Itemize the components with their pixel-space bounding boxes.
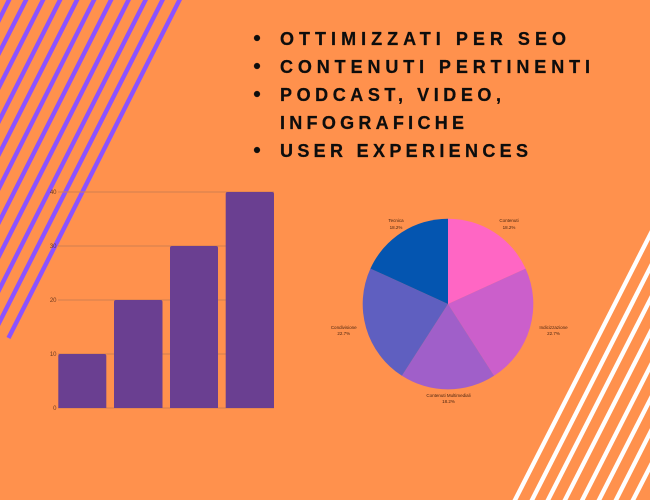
pie labels: 22.7% bbox=[337, 331, 350, 336]
slice: Tecnica bbox=[370, 219, 448, 304]
white diagonal stripes bbox=[514, 231, 650, 500]
bullet 2: CONTENUTI PERTINENTI bbox=[280, 57, 590, 77]
slice: Indicizzazione bbox=[448, 269, 533, 376]
pie labels: Condivisione bbox=[331, 325, 357, 330]
slice: Contenuti Multimediali bbox=[402, 304, 494, 389]
axis labels bbox=[50, 190, 57, 412]
bullet 4: USER EXPERIENCES bbox=[280, 141, 528, 161]
pie labels bbox=[331, 218, 568, 404]
pie chart bbox=[331, 218, 568, 404]
bullet 1: OTTIMIZZATI PER SEO bbox=[280, 29, 566, 49]
axis labels: 20 bbox=[50, 298, 57, 304]
pie labels: Indicizzazione bbox=[539, 325, 568, 330]
pie labels: Tecnica bbox=[388, 218, 404, 223]
purple diagonal stripes bbox=[0, 0, 180, 338]
axis labels: 0 bbox=[53, 406, 57, 412]
bullet 3 bbox=[254, 85, 501, 133]
pie labels: 18.2% bbox=[390, 225, 402, 230]
pie labels: Contenuti bbox=[499, 218, 519, 223]
pie labels: Contenuti Multimediali bbox=[426, 393, 471, 398]
bars bbox=[58, 192, 274, 408]
bullet 3: INFOGRAFICHE bbox=[280, 113, 464, 133]
pie labels: 22.7% bbox=[547, 331, 560, 336]
axis labels: 30 bbox=[50, 244, 57, 250]
axis labels: 10 bbox=[50, 352, 57, 358]
bar chart bbox=[50, 190, 274, 412]
slice: Contenuti bbox=[448, 219, 526, 304]
pie labels: 18.2% bbox=[442, 399, 455, 404]
bullet list bbox=[254, 29, 590, 161]
slice: Condivisione bbox=[363, 269, 448, 376]
axis labels: 40 bbox=[50, 190, 57, 196]
pie labels: 18.2% bbox=[503, 225, 515, 230]
bullet 3: PODCAST, VIDEO, bbox=[280, 85, 501, 105]
